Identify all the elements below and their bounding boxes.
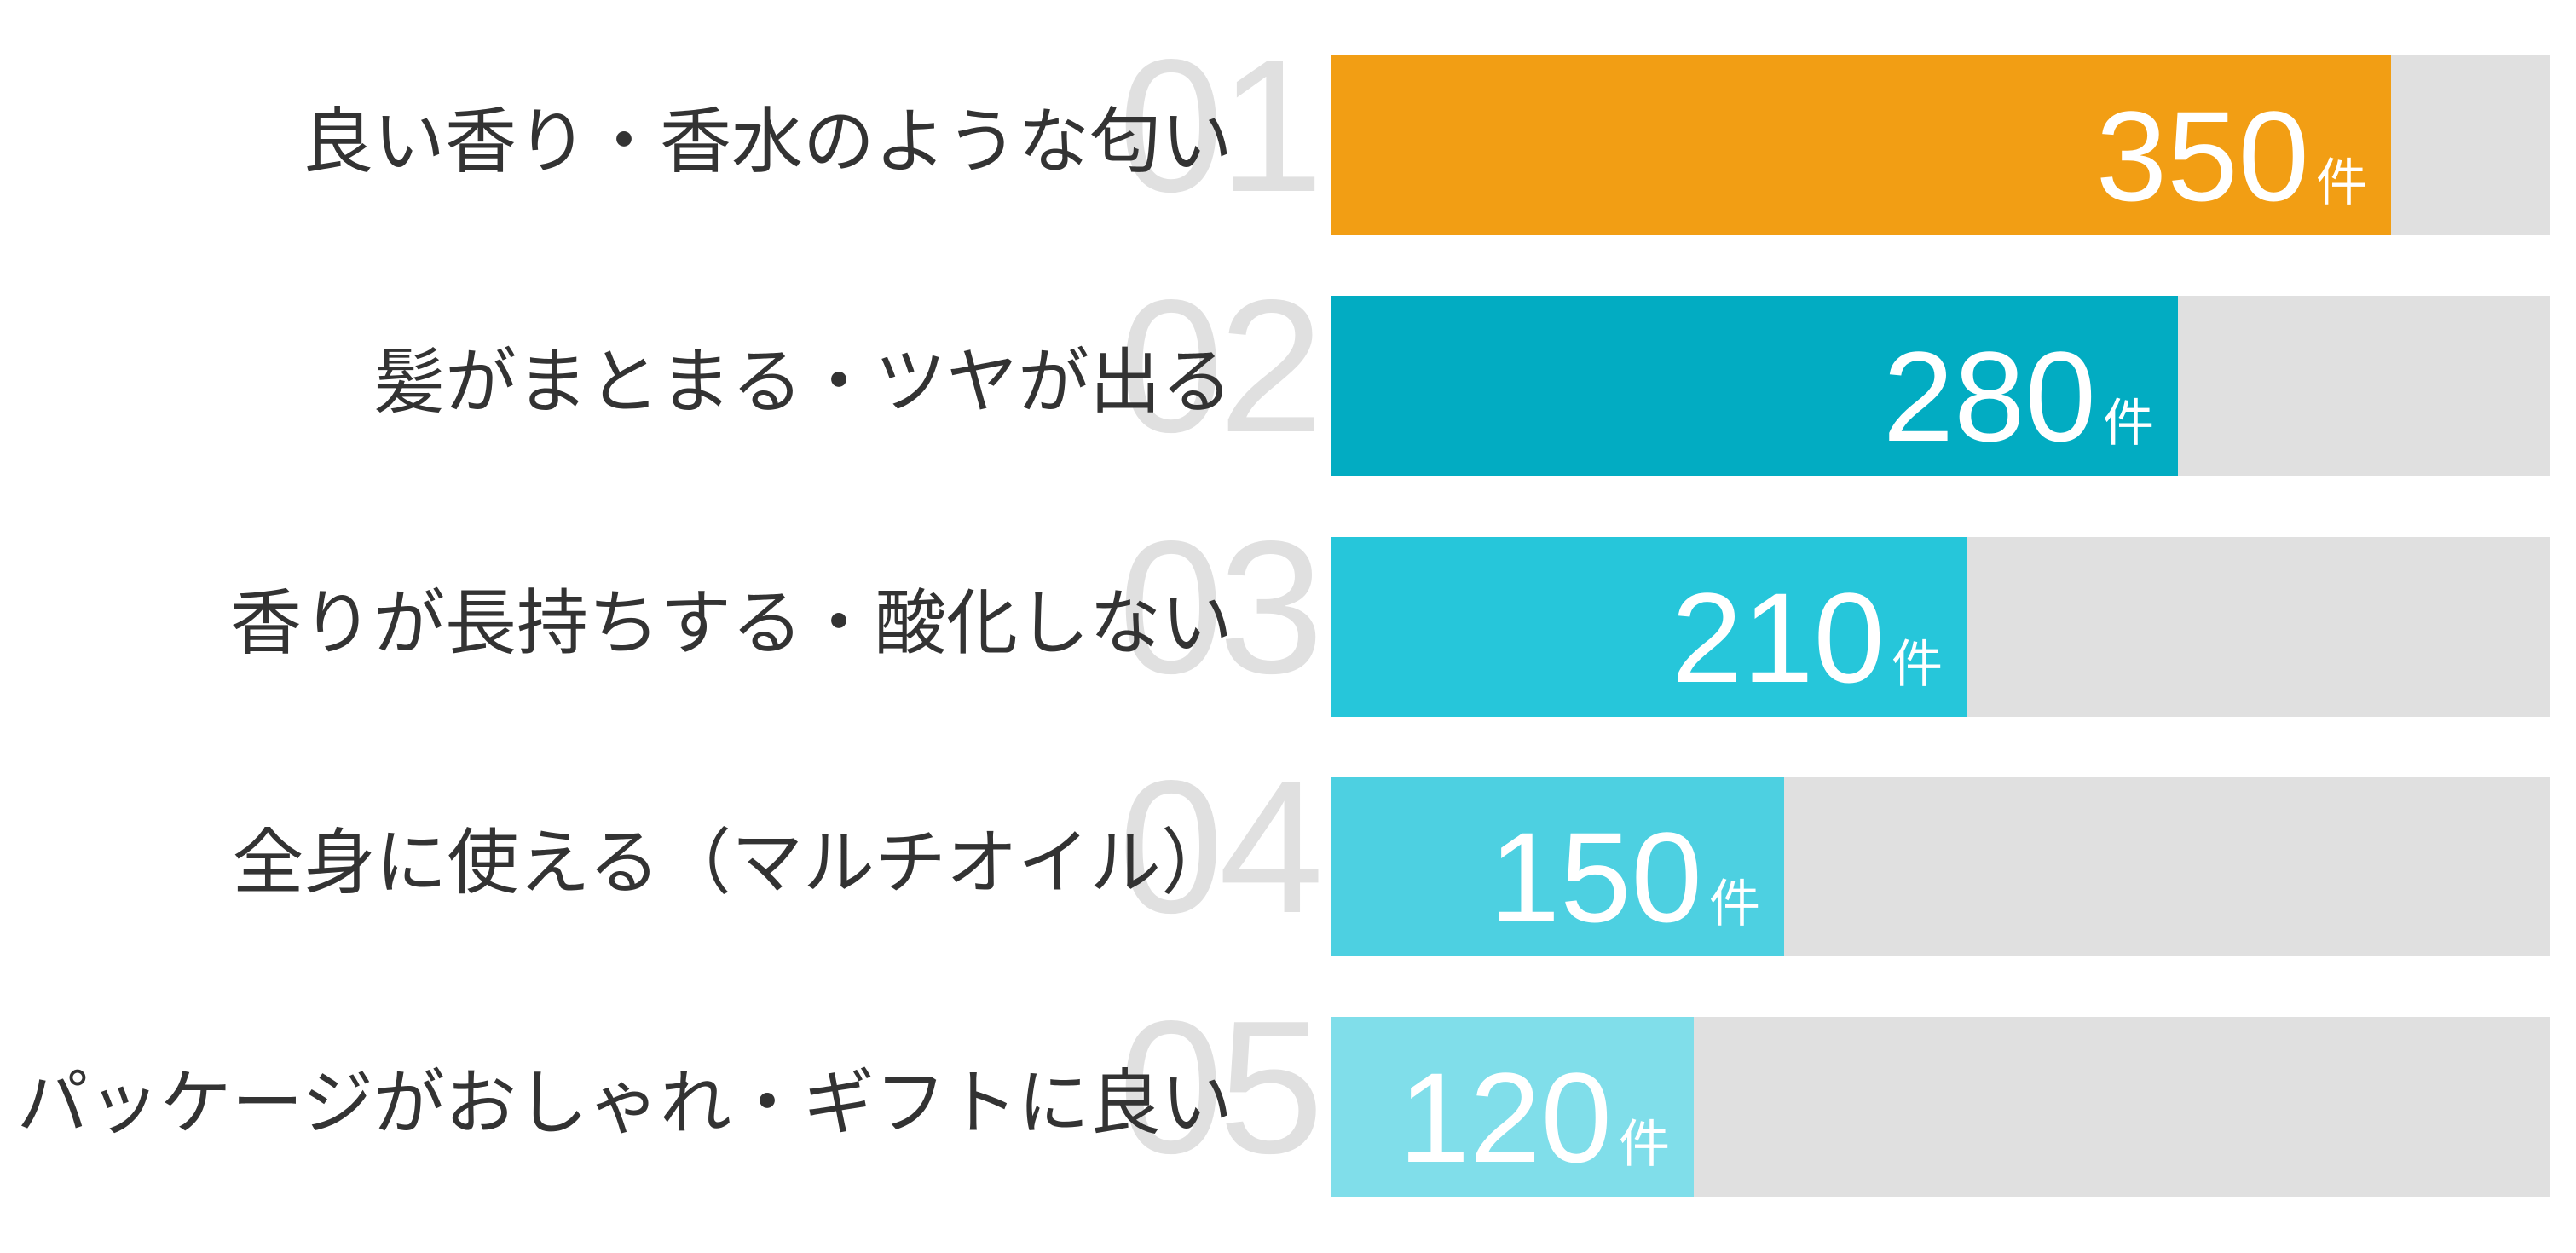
bar 2: 280件 (1883, 325, 2154, 468)
row 1 (302, 20, 2550, 235)
label 1: 良い香り・香水のような匂い (302, 84, 1233, 188)
bar 3 (1331, 537, 2550, 717)
label 4: 全身に使える（マルチオイル） (233, 806, 1233, 909)
bar 4: 150件 (1489, 806, 1760, 949)
row 5 (17, 982, 2550, 1197)
row 2 (373, 261, 2550, 476)
bar 1: 350件 (2096, 84, 2367, 228)
label 5: パッケージがおしゃれ・ギフトに良い (17, 1046, 1233, 1149)
bar 5 (1331, 1017, 2550, 1197)
bar 4 (1331, 777, 2550, 956)
rank 04: 04 (1118, 742, 1319, 953)
rank 01: 01 (1118, 20, 1319, 232)
label 3: 香りが長持ちする・酸化しない (230, 566, 1233, 669)
bar 1 (1331, 55, 2550, 235)
bar 5: 120件 (1399, 1046, 1670, 1189)
label 2: 髪がまとまる・ツヤが出る (373, 325, 1233, 428)
row 4 (233, 742, 2550, 956)
rank 03: 03 (1118, 502, 1319, 713)
bar 2 (1331, 296, 2550, 476)
row 3 (230, 502, 2550, 717)
rank 02: 02 (1118, 261, 1319, 472)
rank 05: 05 (1118, 982, 1319, 1193)
bar 3: 210件 (1672, 566, 1943, 709)
